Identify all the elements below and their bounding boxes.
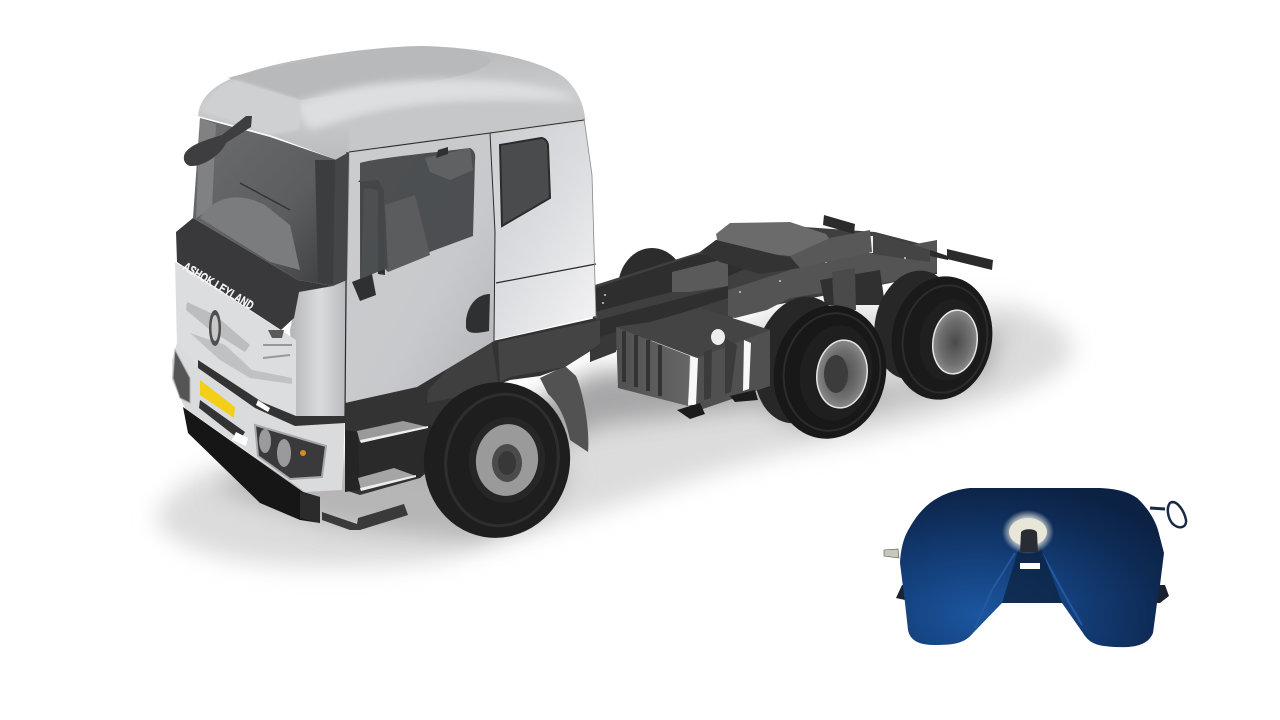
release handle <box>1150 502 1186 527</box>
plate body <box>900 488 1164 647</box>
hub plate <box>1009 518 1047 546</box>
fascia with brand name <box>176 218 333 330</box>
cab steps <box>357 421 428 491</box>
door handle <box>466 294 490 333</box>
front corner panel <box>290 152 350 418</box>
front underrun bar <box>183 407 320 523</box>
brand name: ASHOK LEYLAND <box>180 260 256 313</box>
panel seams <box>345 118 596 417</box>
rear marker lamps <box>823 215 993 270</box>
last rear wheel <box>882 268 1002 408</box>
bumper shading and slots <box>198 360 345 446</box>
coupling plate <box>884 488 1186 647</box>
door window interior <box>385 147 473 272</box>
door window <box>360 148 475 279</box>
fuel tank <box>616 308 770 419</box>
headlight <box>255 425 326 479</box>
number plate <box>200 380 235 418</box>
far rear wheel <box>618 248 686 328</box>
fifth wheel on chassis <box>700 222 872 274</box>
kingpin slot <box>1020 529 1038 552</box>
side mirror <box>352 180 407 301</box>
sun visor mirror <box>184 116 252 166</box>
slot window <box>1020 563 1040 569</box>
near rail <box>728 240 937 318</box>
far rail <box>595 254 760 312</box>
chassis frame <box>590 226 937 362</box>
throat shadow <box>1002 545 1062 603</box>
windscreen <box>193 118 349 286</box>
rear mudguard <box>540 366 588 452</box>
throat ridges <box>975 553 1082 628</box>
leaf spring <box>820 268 885 310</box>
ground shadow <box>155 305 1073 567</box>
side pin <box>884 549 899 558</box>
bottom step pedal <box>322 504 408 530</box>
cab underside and steps housing <box>345 318 600 495</box>
cab rear panels <box>490 118 596 340</box>
bumper <box>172 343 345 492</box>
fog lamp left <box>173 350 190 403</box>
mounting lugs <box>896 585 1169 603</box>
rear door window <box>500 138 550 226</box>
middle rear wheel <box>763 296 897 448</box>
rear axle inner tyres <box>743 263 966 432</box>
roof <box>198 46 585 160</box>
front wheel <box>412 371 582 549</box>
door <box>345 132 495 403</box>
grille <box>175 262 296 420</box>
hub glow <box>1002 510 1054 554</box>
